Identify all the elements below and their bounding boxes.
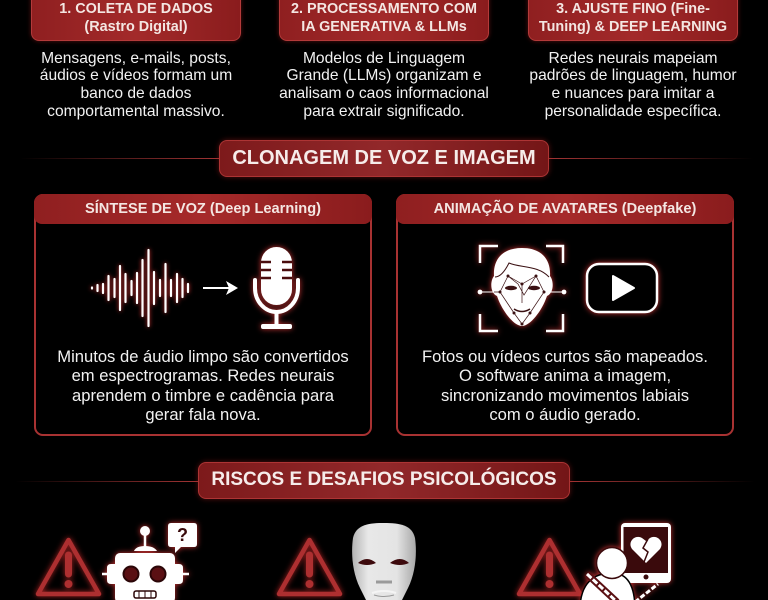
step 2 header: 2. PROCESSAMENTO COM	[291, 1, 477, 17]
panel: avatar animation	[396, 194, 734, 436]
step 3 text: padrões de linguagem, humor	[529, 67, 737, 84]
step 3 header	[528, 0, 738, 41]
icon: arrow	[203, 281, 238, 295]
icon: dependent person with tablet	[576, 518, 676, 600]
step 1 header	[31, 0, 241, 41]
icon: warning 3	[513, 534, 584, 600]
step 2 header: IA GENERATIVA & LLMs	[301, 19, 467, 35]
icon: confused robot	[98, 518, 202, 600]
icon: warning 2	[273, 534, 346, 600]
step 3 header: Tuning) & DEEP LEARNING	[539, 19, 727, 35]
step 2 text: para extrair significado.	[303, 103, 465, 120]
step 1 text: banco de dados	[80, 85, 191, 102]
panel: voice synthesis	[34, 194, 372, 436]
panel heading: ANIMAÇÃO DE AVATARES (Deepfake)	[434, 201, 696, 217]
step 1 header: (Rastro Digital)	[84, 19, 188, 35]
icon: face scan	[474, 240, 570, 337]
avatar animation text	[422, 347, 708, 424]
avatar animation text: Fotos ou vídeos curtos são mapeados.	[422, 347, 708, 366]
icon: video play	[581, 258, 663, 318]
section heading: voice and image cloning: CLONAGEM DE VOZ E IMAGEM	[232, 147, 536, 169]
step 3 text: e nuances para imitar a	[552, 85, 714, 102]
section heading: voice and image cloning	[219, 140, 549, 177]
step 1 text: Mensagens, e-mails, posts,	[41, 50, 231, 66]
icon: warning 1	[32, 534, 105, 600]
divider right	[570, 481, 755, 482]
step 1 text	[40, 50, 232, 120]
avatar animation text: O software anima a imagem,	[459, 366, 671, 385]
section heading: risks: RISCOS E DESAFIOS PSICOLÓGICOS	[211, 469, 557, 490]
panel heading: SÍNTESE DE VOZ (Deep Learning)	[85, 201, 321, 217]
step 3 text: personalidade específica.	[545, 103, 721, 120]
step 1 text: áudios e vídeos formam um	[40, 67, 232, 84]
section heading: risks	[198, 462, 570, 499]
step 1 text: comportamental massivo.	[47, 103, 225, 120]
panel heading	[396, 194, 734, 224]
divider right	[549, 158, 754, 159]
icon: microphone	[248, 242, 305, 334]
step 2 text: Grande (LLMs) organizam e	[286, 67, 482, 84]
voice synthesis text: Minutos de áudio limpo são convertidos	[57, 347, 349, 366]
step 3 text	[529, 50, 737, 120]
avatar animation text: sincronizando movimentos labiais	[441, 386, 689, 405]
step 2 text	[279, 50, 489, 120]
panel heading	[34, 194, 372, 224]
step 2 text: Modelos de Linguagem	[303, 50, 465, 66]
voice synthesis text	[57, 347, 349, 424]
step 3 text: Redes neurais mapeiam	[548, 50, 718, 66]
voice synthesis text: em espectrogramas. Redes neurais	[72, 366, 334, 385]
step 1 header: 1. COLETA DE DADOS	[59, 1, 213, 17]
step 2 header	[279, 0, 489, 41]
voice synthesis text: gerar fala nova.	[145, 405, 261, 424]
icon: confused robot: ?	[177, 525, 188, 545]
step 2 text: analisam o caos informacional	[279, 85, 489, 102]
step 3 header: 3. AJUSTE FINO (Fine-	[556, 1, 710, 17]
icon: mask	[352, 523, 416, 600]
divider left	[15, 481, 198, 482]
avatar animation text: com o áudio gerado.	[489, 405, 641, 424]
voice synthesis text: aprendem o timbre e cadência para	[72, 386, 334, 405]
divider left	[20, 158, 219, 159]
